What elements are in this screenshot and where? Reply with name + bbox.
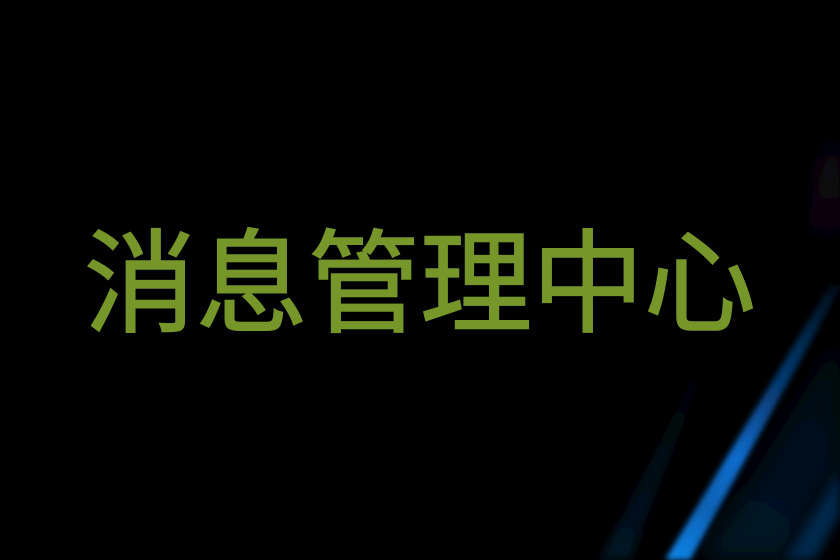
streak: lower-right blue beam (785, 470, 840, 560)
streak: faint left beam (600, 340, 716, 560)
streak: wide blue haze (700, 335, 840, 560)
streak: purple glow (798, 95, 840, 255)
title: 消息管理中心 (84, 222, 756, 347)
streak: main blue beam (665, 285, 840, 560)
